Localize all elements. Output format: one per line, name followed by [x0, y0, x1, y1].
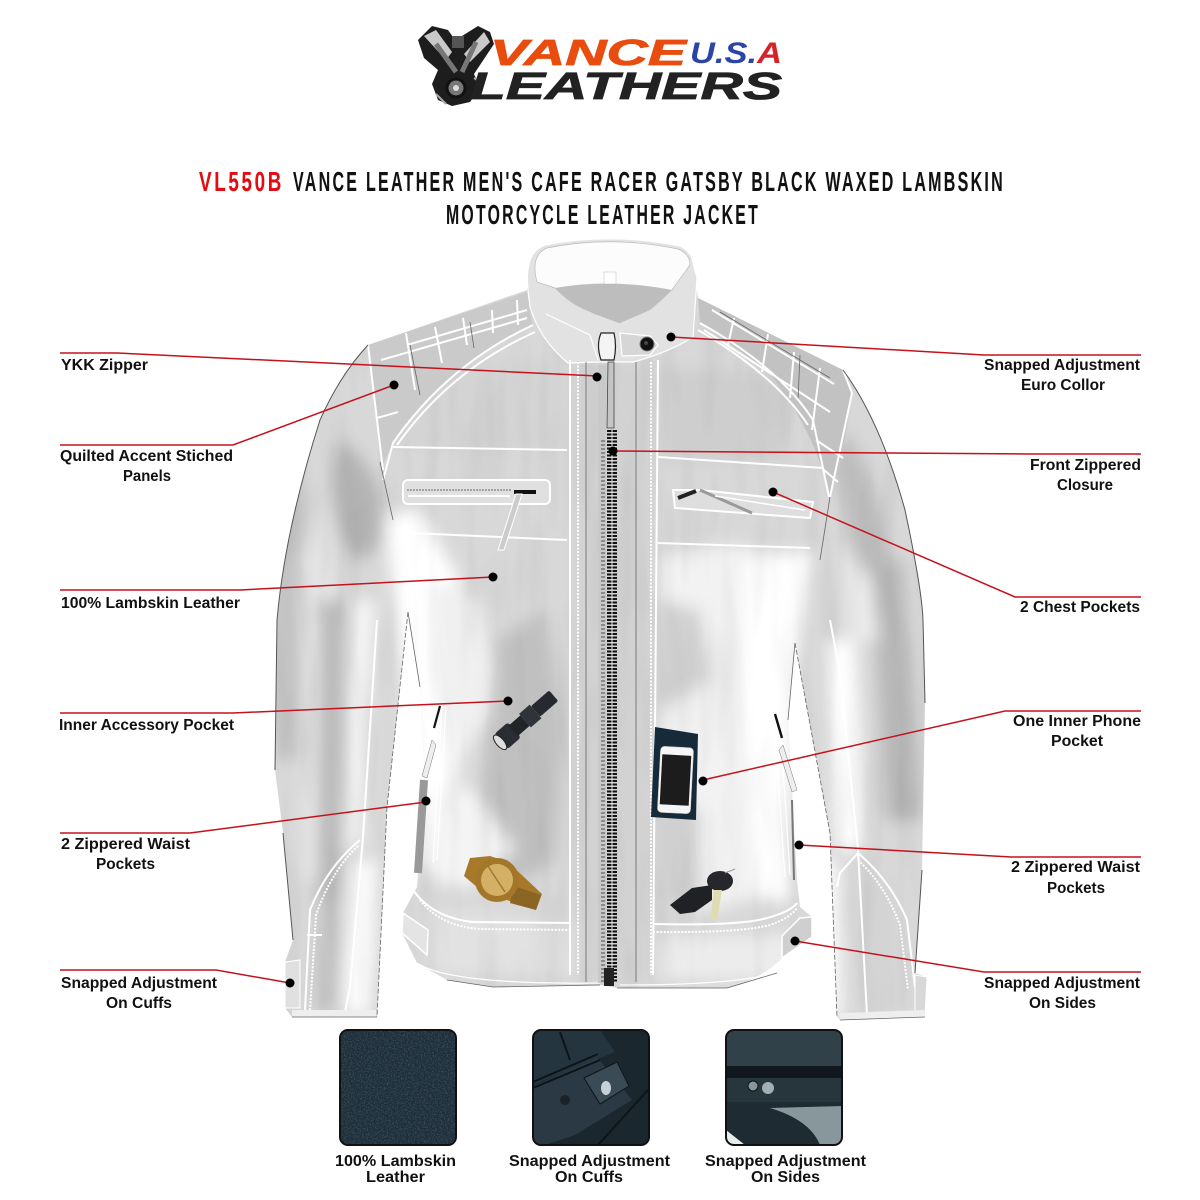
detail panel: sides [705, 1030, 867, 1186]
collar buckle [598, 333, 616, 360]
cuff tabs [285, 960, 300, 1008]
callout: waist pockets left [60, 796, 430, 833]
callout: quilted panels [60, 380, 398, 445]
detail panel: lambskin [335, 1030, 456, 1186]
callout: inner accessory pocket [60, 696, 512, 713]
caption [335, 1153, 456, 1186]
label: One Inner Phone Pocket [1013, 713, 1141, 750]
callout lines and dots [60, 332, 1141, 988]
label: Front Zippered Closure: Closure [1057, 477, 1113, 494]
right labels [984, 357, 1141, 1012]
icon: car keys [670, 869, 735, 920]
icon: flashlight [490, 688, 560, 752]
side pocket right [773, 705, 797, 880]
detail panel: cuffs [509, 1030, 671, 1186]
label: Quilted Accent Stiched Panels [60, 448, 233, 485]
label: 100% Lambskin Leather: 100% Lambskin Leather [61, 595, 240, 612]
label: Snapped Adjustment On Cuffs: On Cuffs [106, 995, 172, 1012]
title line 2: MOTORCYCLE LEATHER JACKET [446, 199, 760, 230]
icon: gold watch [464, 856, 542, 910]
caption [509, 1153, 671, 1186]
right sleeve seams [830, 620, 915, 1015]
label: YKK Zipper: YKK Zipper [61, 357, 148, 374]
label: Snapped Adjustment Euro Collor: Euro Collor [1021, 377, 1105, 394]
hem seams [413, 890, 797, 924]
label: Snapped Adjustment On Sides: Snapped Adjustment [984, 975, 1141, 992]
callout: cuffs [60, 970, 294, 988]
callout: front zippered closure [608, 446, 1141, 456]
label: 2 Zippered Waist Pockets: 2 Zippered Waist [61, 836, 191, 853]
caption: Leather [366, 1169, 425, 1186]
title model number: VL550B [199, 166, 284, 197]
label: Snapped Adjustment On Sides: On Sides [1029, 995, 1096, 1012]
label: Quilted Accent Stiched Panels: Quilted Accent Stiched [60, 448, 233, 465]
photo: side snap [726, 1030, 842, 1145]
side pocket left [418, 703, 446, 873]
label: Snapped Adjustment On Cuffs: Snapped Adjustment [61, 975, 218, 992]
callout: lambskin leather [60, 572, 498, 590]
callout: snapped sides [790, 936, 1141, 972]
jacket shading [275, 288, 925, 1020]
label: Front Zippered Closure: Front Zippered [1030, 457, 1141, 474]
label: 2 Zippered Waist Pockets: 2 Zippered Waist [1011, 859, 1141, 876]
callout: phone pocket [698, 711, 1141, 786]
photo: cuff snap [533, 1030, 649, 1145]
quilted shoulder panels [368, 292, 852, 497]
label: Snapped Adjustment Euro Collor [984, 357, 1141, 394]
callout: waist pockets right [794, 840, 1141, 857]
caption [705, 1153, 867, 1186]
left sleeve seams [305, 620, 377, 1012]
chest panel lines [393, 447, 823, 548]
label: Quilted Accent Stiched Panels: Panels [123, 468, 171, 485]
label: 2 Zippered Waist Pockets: Pockets [96, 856, 155, 873]
label: Snapped Adjustment On Cuffs [61, 975, 218, 1012]
jacket edges [275, 345, 925, 973]
sleeve bottom bands [292, 1010, 376, 1017]
stitching and seams [275, 345, 927, 1020]
caption: On Cuffs [555, 1169, 623, 1186]
raglan seams [383, 325, 535, 480]
label: Inner Accessory Pocket: Inner Accessory Pocket [59, 717, 235, 734]
caption: On Sides [751, 1169, 820, 1186]
label: 2 Zippered Waist Pockets [1011, 859, 1141, 897]
left labels [59, 357, 240, 1012]
logo word: U.S.A: U.S. A [690, 37, 782, 70]
hem tabs [402, 913, 428, 955]
logo word: Vance: VANCE [490, 32, 688, 73]
photo: leather texture [340, 1030, 456, 1145]
collar [527, 239, 697, 363]
label: One Inner Phone Pocket: Pocket [1051, 733, 1104, 750]
zipper [598, 362, 614, 986]
armpit creases [380, 462, 830, 560]
collar snap [640, 337, 654, 351]
label: 2 Chest Pockets: 2 Chest Pockets [1020, 599, 1140, 616]
jacket illustration [60, 230, 1141, 1030]
icon: phone in pocket [651, 727, 698, 820]
caption: 100% Lambskin [335, 1153, 456, 1170]
right chest pocket [673, 490, 813, 518]
label: 2 Zippered Waist Pockets: Pockets [1047, 880, 1105, 897]
icon: engine [418, 26, 494, 106]
label: 2 Zippered Waist Pockets [61, 836, 191, 873]
label: Snapped Adjustment Euro Collor: Snapped Adjustment [984, 357, 1141, 374]
label: Snapped Adjustment On Sides [984, 975, 1141, 1012]
callout: euro collar [666, 332, 1141, 355]
caption: Snapped Adjustment [705, 1153, 867, 1170]
title [199, 166, 1005, 230]
front placket seams [570, 360, 658, 975]
label: One Inner Phone Pocket: One Inner Phone [1013, 713, 1141, 730]
callout: chest pockets [768, 488, 1141, 597]
logo [418, 26, 782, 108]
logo word: Leathers: LEATHERS [470, 66, 782, 108]
caption: Snapped Adjustment [509, 1153, 671, 1170]
label: Front Zippered Closure [1030, 457, 1141, 494]
left chest pocket [403, 480, 550, 550]
callout: YKK zipper [60, 353, 602, 382]
